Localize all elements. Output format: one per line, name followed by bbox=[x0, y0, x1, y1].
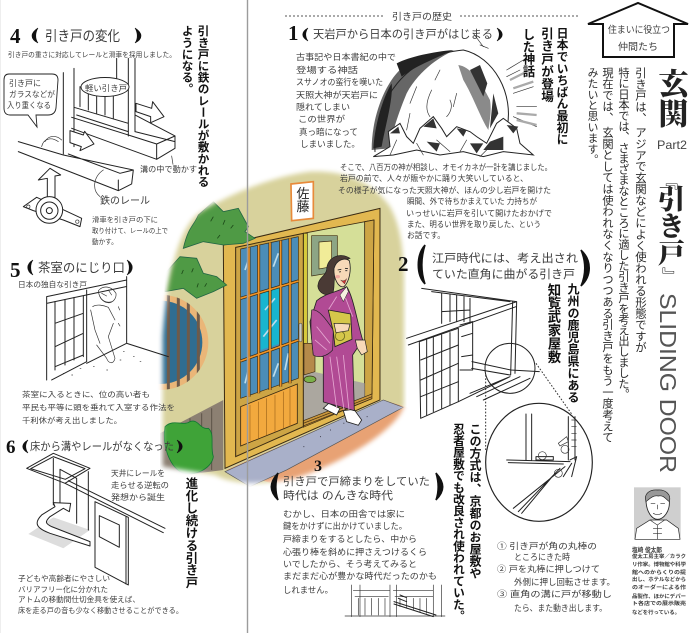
barrier-free note bbox=[18, 574, 183, 615]
pulley note bbox=[92, 215, 168, 246]
speech bubble: glass makes door heavier: 入り重くなる bbox=[7, 100, 51, 110]
author bio: 館へのからくりの提 bbox=[632, 568, 687, 576]
rail note: 走らせる逆転の bbox=[111, 480, 169, 490]
section label: history of sliding doors: 引き戸の歴史 bbox=[392, 11, 453, 23]
intro text: 現在では、 玄関としては使われなくなりつつある引き戸をもう一度考えて bbox=[601, 67, 614, 443]
barrier-free note: アトムの移動間仕切金具を使えば、 bbox=[18, 595, 140, 604]
body text: いでしたから、そう考えてみると bbox=[283, 559, 417, 569]
body text: むかし、日本の田舎では家に bbox=[283, 508, 405, 519]
subheading: 日本の独自な引き戸 bbox=[18, 279, 88, 289]
author bio: 品製作、ほかにデパー bbox=[632, 592, 686, 600]
heading 5: 茶室のにじり口 bbox=[38, 261, 125, 275]
Part2: Part2 bbox=[657, 138, 687, 152]
panel 1: history, Ama-no-Iwato bbox=[285, 11, 578, 240]
pulley note: 取り付けて、レールの上で bbox=[92, 226, 168, 235]
icon: house badge bbox=[588, 3, 688, 57]
vertical caption: Chiran samurai residence bbox=[546, 283, 580, 403]
heading 6: 床から溝やレールがなくなった bbox=[30, 439, 174, 453]
numbered steps: ところにきた時 bbox=[514, 552, 570, 562]
arrow right upper bbox=[136, 102, 164, 123]
heading 1: 1 bbox=[288, 21, 298, 45]
author bio: 俊太工房主宰／カラク bbox=[632, 552, 686, 560]
barrier-free note: 子どもや高齢者にやさしい bbox=[18, 574, 110, 583]
bubble: light sliding door bbox=[81, 78, 129, 96]
speech bubble: glass makes door heavier: ガラスなどが bbox=[9, 89, 55, 99]
author portrait bbox=[634, 487, 681, 539]
woman in purple kimono bbox=[310, 256, 367, 425]
vertical caption: first myth bbox=[521, 27, 569, 145]
illustration: gods pulling the rock door bbox=[372, 33, 537, 157]
crowd of gods bbox=[373, 117, 533, 157]
heading 1 bbox=[288, 21, 502, 45]
title 引き戸: 』 bbox=[660, 267, 680, 285]
road and ground bbox=[227, 400, 410, 487]
myth text: 隠れてしまい bbox=[296, 102, 350, 112]
spine line bbox=[246, 0, 248, 633]
vertical caption: first myth: した神話 bbox=[521, 28, 535, 78]
icon: house badge: 仲間たち bbox=[618, 41, 658, 53]
heading 6 bbox=[6, 437, 182, 458]
pulley note: 滑車を引き戸の下に bbox=[92, 215, 158, 224]
vertical caption: also used in ninja houses bbox=[452, 423, 482, 622]
house exterior backdrop bbox=[158, 168, 407, 486]
heading 2: 2 bbox=[398, 252, 408, 276]
arrow right lower bbox=[70, 131, 94, 151]
panel 3: no need to lock doors bbox=[271, 458, 445, 617]
myth text: しまいました。 bbox=[300, 139, 360, 149]
round window bbox=[113, 293, 208, 390]
heading 3: 引き戸で戸締まりをしていた bbox=[283, 475, 430, 488]
numbered steps: ③ 直角の溝に戸が移動し bbox=[497, 588, 612, 599]
myth text: スサノオの蛮行を嘆いた bbox=[296, 77, 383, 87]
story text: 岩戸の前で、人々が賑やかに踊り大笑いしていると、 bbox=[340, 173, 528, 183]
speech bubble: glass makes door heavier: 引き戸に bbox=[9, 79, 41, 88]
intro text: 引き戸の重さに対応してレールと滑車を採用しました。 bbox=[8, 50, 176, 59]
heading 6: 6 bbox=[6, 437, 16, 458]
numbered steps: たら、また動き出します。 bbox=[514, 602, 607, 613]
icon: house badge: 住まいに役立つ bbox=[608, 24, 670, 36]
body text: 戸締まりをするとしたら、中から bbox=[283, 533, 417, 544]
diagram: nijiriguchi door with person bbox=[47, 277, 168, 380]
central illustration: woman at sliding entrance door bbox=[158, 168, 407, 486]
speech bubble: glass makes door heavier bbox=[4, 74, 58, 127]
description bbox=[22, 389, 175, 425]
body text: 心張り棒を斜めに押さえつけるくら bbox=[283, 546, 427, 557]
label: moves in groove: 溝の中で動かす bbox=[140, 164, 197, 174]
pine upper branch bbox=[183, 202, 255, 248]
story text bbox=[338, 162, 552, 240]
numbered steps: ① 引き戸が角の丸棒の bbox=[497, 540, 597, 551]
author bio: リ作家。博物館や科学 bbox=[632, 560, 687, 568]
title 引き戸: 『 bbox=[658, 172, 678, 190]
vertical caption: first myth: 日本でいちばん最初に bbox=[555, 27, 569, 145]
lower wood wall bbox=[160, 400, 223, 478]
rail note: 天井にレールを bbox=[111, 468, 165, 478]
title 引き戸: 引き戸 bbox=[654, 185, 684, 266]
heading 5: 5 bbox=[10, 258, 20, 282]
body text: しれません。 bbox=[283, 585, 333, 595]
barrier-free note: 床を走る戸の音も少なく移動させることができる。 bbox=[18, 606, 183, 615]
panel 6: no grooves or rails on the floor bbox=[6, 437, 198, 615]
myth text: この世界が bbox=[298, 114, 346, 124]
pulley note: 動かす。 bbox=[92, 237, 118, 246]
intro text: みたいと思います。 bbox=[586, 67, 598, 165]
diagram: door on rail bbox=[18, 58, 175, 227]
pulley wheel bbox=[23, 197, 82, 227]
interior bbox=[303, 220, 374, 427]
heading 2: ていた直角に曲がる引き戸 bbox=[432, 267, 575, 281]
sliding door panel bbox=[236, 233, 303, 457]
arrow up to rail bbox=[38, 168, 61, 197]
heading 4 bbox=[10, 24, 141, 48]
heading 3: 時代は のんきな時代 bbox=[283, 490, 393, 502]
intro text: 引き戸は、 アジアで玄関などによく使われる形態ですが bbox=[634, 66, 647, 353]
diagram: corner sliding doors bbox=[407, 288, 592, 521]
story text: その様子が気になった天照大神が、ほんの少し岩戸を開けた bbox=[338, 185, 551, 195]
story text: また、明るい世界を取り戻した、という bbox=[407, 219, 541, 229]
nameplate 佐藤: 佐藤 bbox=[294, 187, 309, 213]
panel 4: evolution of the sliding door bbox=[4, 24, 210, 246]
SLIDING DOOR: SLIDING DOOR bbox=[655, 293, 681, 473]
body text: まだまだ心が豊かな時代だったのかも bbox=[283, 570, 437, 581]
heading 4: 引き戸の変化 bbox=[45, 28, 120, 44]
vertical caption: also used in ninja houses: この方式は、京都のお屋敷や bbox=[468, 423, 482, 579]
vertical caption: Chiran samurai residence: 知覧武家屋敷 bbox=[546, 283, 561, 365]
door frame bbox=[223, 208, 380, 468]
body text: 鍵をかけずに出かけていました。 bbox=[283, 520, 407, 531]
myth text: 真っ暗になって bbox=[299, 127, 358, 137]
author bio: 塩崎 俊太郎 bbox=[632, 545, 663, 554]
numbered steps: ② 戸を丸棒に押しつけて bbox=[497, 563, 600, 574]
intro text: 特に日本では、さまざまなところに適した引き戸を考え出しました。 bbox=[617, 66, 630, 400]
heading 1: 天岩戸から日本の引き戸がはじまる bbox=[313, 27, 493, 41]
numbered steps: 外側に押し回転させます。 bbox=[514, 576, 615, 587]
author bio: のオーダーによる作 bbox=[632, 583, 687, 591]
vertical caption: iron rails: 引き戸に鉄のレールが敷かれる bbox=[196, 25, 210, 187]
diagram: ceiling rail door bbox=[27, 453, 165, 585]
heading 2 bbox=[398, 245, 589, 286]
label: iron rail: 鉄のレール bbox=[100, 194, 150, 207]
vertical caption: ever-evolving door: 進化し続ける引き戸 bbox=[184, 476, 198, 589]
rail note: 発想から誕生 bbox=[111, 492, 165, 502]
story text: そこで、八百万の神が相談し、オモイカネが一計を講じました。 bbox=[340, 162, 552, 172]
small drawing: door propped by stick bbox=[345, 585, 445, 617]
vertical caption: also used in ninja houses: 忍者屋敷でも改良され使われていた。 bbox=[452, 423, 464, 622]
vertical caption: iron rails bbox=[180, 25, 210, 187]
author bio: ト各店での展示販売 bbox=[632, 599, 687, 607]
description: 千利休が考え出しました。 bbox=[22, 415, 122, 425]
panel 2: right-angle sliding door bbox=[398, 245, 615, 622]
myth text: 登場する神話 bbox=[296, 65, 359, 75]
vertical caption: first myth: 引き戸が登場 bbox=[539, 27, 553, 104]
author bio: 出し、ホテルなどから bbox=[632, 575, 686, 583]
nameplate 佐藤 bbox=[291, 182, 313, 221]
story text: お話です。 bbox=[407, 230, 445, 240]
vertical caption: iron rails: ようになる。 bbox=[180, 25, 194, 95]
author bio bbox=[632, 545, 687, 616]
heading 2: 江戸時代には、考え出され bbox=[432, 252, 578, 265]
myth text: 古事記や日本書紀の中で bbox=[296, 52, 396, 62]
intro column bbox=[586, 3, 688, 616]
bubble: light sliding door: 軽い引き戸 bbox=[85, 84, 127, 93]
vertical caption: Chiran samurai residence: 九州の鹿児島県にある bbox=[566, 283, 580, 403]
bush bbox=[164, 421, 213, 474]
pine lower branch bbox=[165, 257, 227, 298]
myth text: 天照大神が天岩戸に bbox=[296, 90, 378, 100]
number 3: 3 bbox=[314, 458, 322, 475]
description: 平民も平等に頭を垂れて入室する作法を bbox=[22, 402, 175, 412]
heading 5 bbox=[10, 258, 132, 282]
myth text bbox=[296, 52, 396, 149]
story text: 瞬間、外で待ちかまえていた 力持ちが bbox=[407, 196, 537, 206]
title 玄関: 玄関 bbox=[654, 68, 688, 128]
numbered steps bbox=[497, 540, 615, 613]
intro text bbox=[586, 66, 647, 443]
panel 5: tea room crawl-through door bbox=[10, 258, 175, 425]
story text: いっせいに岩戸を引いて開けたおかげで bbox=[406, 208, 552, 218]
author bio: などを行っている。 bbox=[632, 608, 680, 616]
body text bbox=[283, 508, 437, 595]
heading 4: 4 bbox=[10, 24, 21, 48]
heading 3 bbox=[271, 473, 443, 502]
barrier-free note: バリアフリー化に分かれた bbox=[18, 585, 108, 594]
curved arrow bbox=[37, 503, 90, 546]
description: 茶室に入るときに、位の高い者も bbox=[22, 389, 150, 399]
rail note bbox=[111, 468, 169, 502]
